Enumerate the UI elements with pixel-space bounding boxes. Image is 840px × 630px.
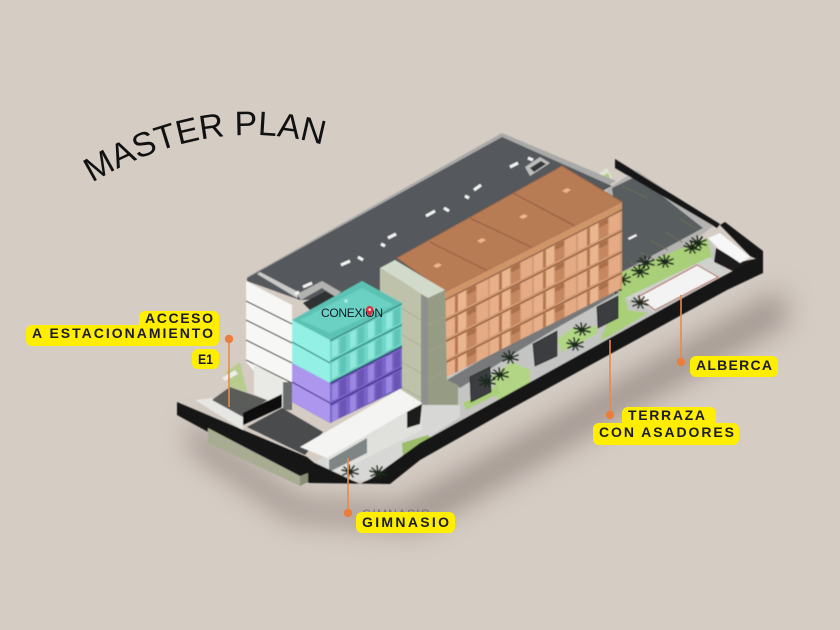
dark driveway ground	[195, 362, 323, 455]
orange residential block	[397, 166, 622, 378]
logo: conexion: CONEXIÓN	[321, 305, 383, 320]
teal and purple tower	[292, 281, 402, 423]
callout: alberca	[677, 295, 778, 377]
ground shadow	[190, 290, 790, 530]
pool house roof	[708, 222, 763, 272]
callout: terraza con asadores: CON ASADORES	[599, 424, 734, 440]
callout: gimnasio: GIMNASIO	[362, 507, 430, 521]
palms	[479, 236, 706, 387]
white tower	[246, 281, 292, 410]
rear black boundary wall	[615, 159, 720, 228]
callout: acceso a estacionamiento	[26, 310, 233, 407]
main roof	[247, 133, 616, 310]
gym pavilion	[300, 389, 460, 482]
title: master plan: MASTER PLAN	[83, 112, 326, 182]
building complex illustration	[177, 133, 763, 486]
callout: acceso a estacionamiento: A ESTACIONAMIENTO	[32, 325, 213, 341]
front boundary wall	[177, 255, 763, 486]
core tower	[380, 260, 458, 420]
callout: acceso a estacionamiento: ACCESO	[145, 310, 213, 326]
purple left face	[292, 363, 330, 423]
callout: acceso a estacionamiento: E1	[198, 351, 213, 367]
pool	[638, 265, 718, 310]
terrace glass pavilions	[470, 296, 618, 402]
callout: gimnasio	[344, 458, 455, 533]
callout: terraza con asadores: TERRAZA	[628, 407, 705, 423]
callout: alberca: ALBERCA	[696, 357, 772, 373]
rear parking deck	[599, 168, 716, 282]
garden terrace	[420, 238, 727, 443]
callout: gimnasio: GIMNASIO	[362, 514, 449, 530]
callout: terraza con asadores	[593, 340, 739, 445]
teal left face	[292, 320, 330, 383]
pool deck	[625, 257, 727, 312]
